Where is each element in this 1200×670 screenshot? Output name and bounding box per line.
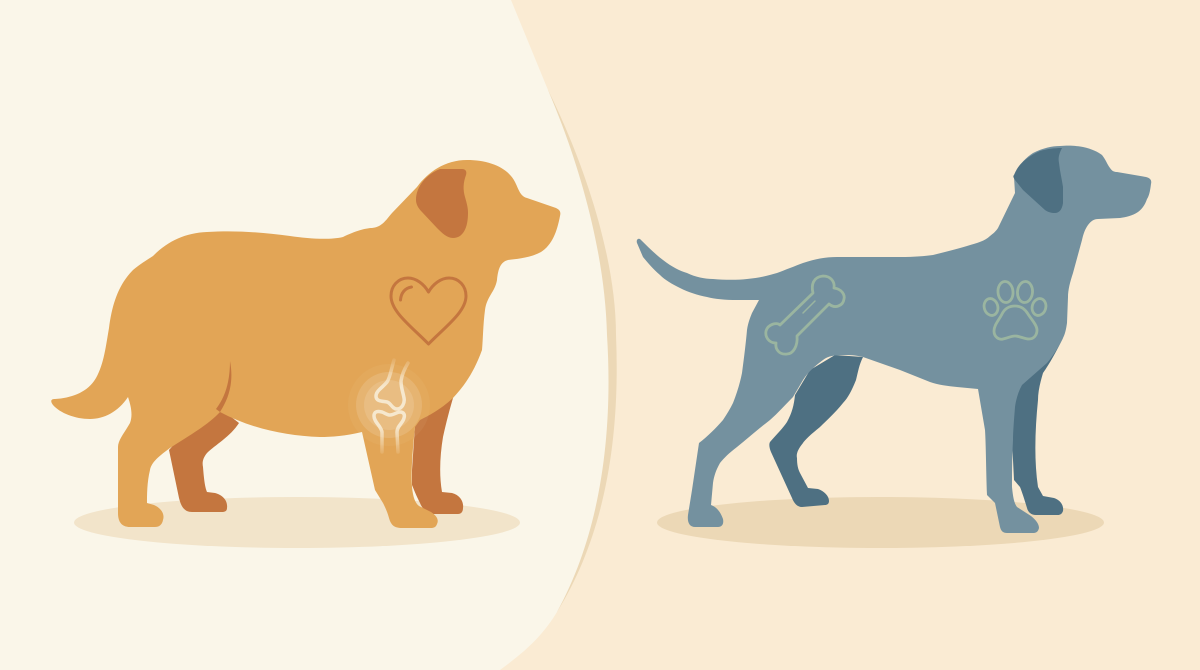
far hind leg [769, 355, 863, 507]
ear [416, 169, 468, 238]
far front leg [412, 398, 463, 514]
icon: heart [391, 278, 466, 344]
far hind leg [169, 402, 239, 512]
body silhouette [51, 160, 560, 528]
overweight dog [51, 160, 560, 528]
ground shadow: left dog [74, 497, 520, 548]
healthy dog [637, 146, 1151, 533]
body silhouette [637, 146, 1151, 533]
divider: curved accent band [540, 90, 617, 612]
thigh fold [216, 361, 231, 412]
background: left cream panel [0, 0, 609, 670]
icon: paw print [982, 281, 1048, 339]
icon: inflamed knee joint [348, 360, 430, 452]
icon: bone [766, 276, 844, 354]
far front leg [1010, 338, 1063, 515]
ear [1013, 148, 1063, 213]
ground shadow: right dog [657, 497, 1104, 548]
